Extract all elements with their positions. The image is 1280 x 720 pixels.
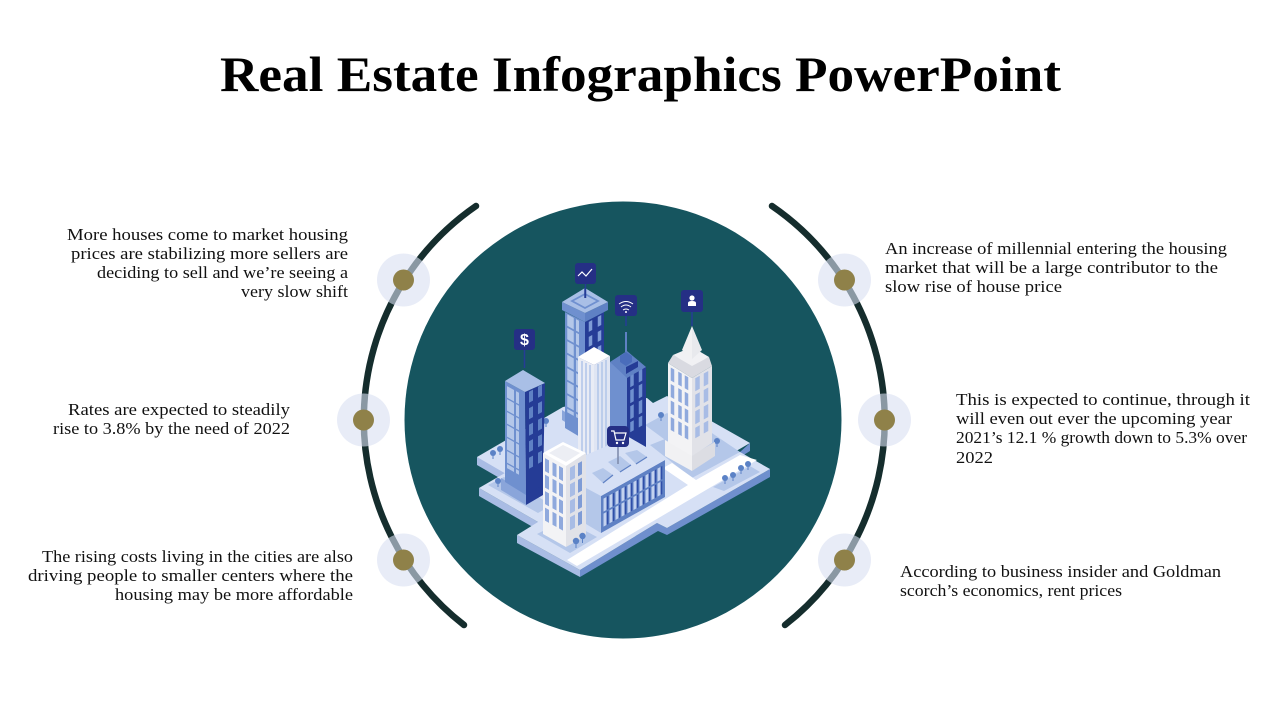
text block: middle left bbox=[53, 400, 291, 438]
mid blue tower with antenna bbox=[610, 332, 646, 447]
text block: middle right: 2021’s 12.1 % growth down to 5.3% over bbox=[956, 428, 1247, 447]
text block: bottom left bbox=[28, 547, 353, 604]
title: Real Estate Infographics PowerPoint bbox=[220, 46, 1061, 102]
text block: middle right: This is expected to continue, through it bbox=[956, 390, 1250, 409]
white front building bbox=[543, 442, 586, 548]
marker: middle left bbox=[337, 394, 390, 446]
pin: wifi bbox=[615, 295, 637, 326]
marker: middle right bbox=[858, 394, 911, 446]
central teal circle bbox=[404, 202, 842, 638]
road bbox=[567, 455, 757, 566]
right arc bbox=[772, 206, 885, 625]
text block: top left: More houses come to market housing bbox=[67, 225, 349, 244]
pin: dollar: $ bbox=[520, 332, 529, 349]
text block: middle left: rise to 3.8% by the need of 2022 bbox=[53, 419, 290, 438]
text block: top right: slow rise of house price bbox=[885, 277, 1062, 296]
text block: top right bbox=[885, 239, 1228, 296]
text block: bottom right bbox=[900, 562, 1222, 600]
text block: top left: deciding to sell and we’re seeing a bbox=[97, 263, 348, 282]
back ground plate bbox=[477, 396, 750, 530]
text block: top left bbox=[67, 225, 349, 301]
tall blue tower bbox=[562, 288, 608, 440]
blue dollar tower bbox=[501, 370, 545, 505]
trees bbox=[490, 412, 751, 487]
marker: bottom left bbox=[377, 534, 430, 586]
text block: middle right bbox=[956, 390, 1250, 467]
pin: growth chart bbox=[575, 263, 596, 298]
text block: top right: An increase of millennial entering the housing bbox=[885, 239, 1228, 258]
text block: middle right: will even out ever the upcoming year bbox=[956, 409, 1232, 428]
pin: person bbox=[681, 290, 703, 326]
text block: bottom left: housing may be more affordable bbox=[115, 585, 353, 604]
text block: top left: prices are stabilizing more sellers are bbox=[71, 244, 348, 263]
marker: bottom right bbox=[818, 534, 871, 586]
pin: dollar bbox=[514, 329, 535, 368]
front ground plate bbox=[479, 425, 770, 577]
text block: bottom left: driving people to smaller centers where the bbox=[28, 566, 353, 585]
text block: middle left: Rates are expected to steadily bbox=[68, 400, 291, 419]
pin: shopping cart bbox=[607, 426, 629, 447]
text block: middle right: 2022 bbox=[956, 448, 993, 467]
low blue building bbox=[586, 438, 665, 533]
text block: top left: very slow shift bbox=[241, 282, 348, 301]
isometric city illustration bbox=[477, 263, 770, 577]
text block: bottom left: The rising costs living in the cities are also bbox=[42, 547, 353, 566]
text block: top right: market that will be a large contributor to the bbox=[885, 258, 1218, 277]
marker: top left bbox=[377, 254, 430, 306]
white centre tower bbox=[578, 347, 610, 465]
marker: top right bbox=[818, 254, 871, 306]
text block: bottom right: According to business insider and Goldman bbox=[900, 562, 1222, 581]
left arc bbox=[364, 206, 476, 625]
text block: bottom right: scorch’s economics, rent prices bbox=[900, 581, 1122, 600]
white spire tower bbox=[665, 326, 715, 471]
